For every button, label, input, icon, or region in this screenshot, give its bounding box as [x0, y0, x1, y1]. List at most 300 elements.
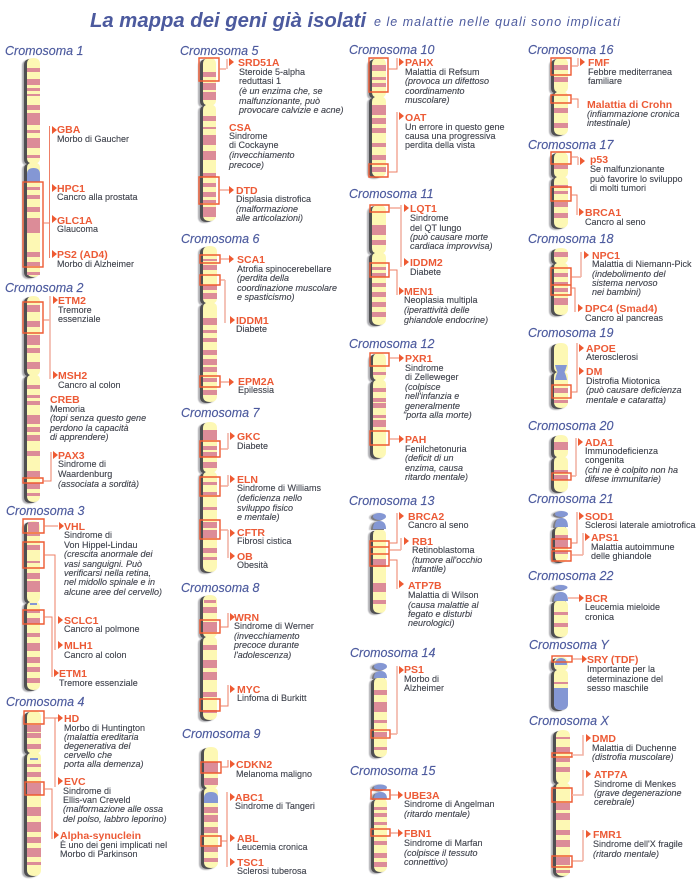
connectors — [571, 277, 581, 312]
panel: Cromosoma 8 — [181, 581, 314, 720]
connectors — [571, 66, 578, 108]
gene OB — [230, 551, 268, 570]
chromosome 5 diagram — [203, 58, 216, 221]
gene NPC1: NPC1 — [592, 250, 620, 262]
gene APOE: Aterosclerosi — [586, 352, 638, 362]
gene SCLC1: Cancro al polmone — [64, 624, 140, 634]
chromosome X diagram — [556, 730, 570, 876]
gene Alpha-synuclein: È uno dei geni implicati nel — [60, 840, 167, 850]
heading: Cromosoma 15 — [350, 764, 435, 778]
connector — [572, 658, 583, 660]
gene PS1 — [399, 664, 444, 693]
gene VHL: alcune aree del cervello) — [64, 587, 162, 597]
gene PAHX: muscolare) — [405, 95, 450, 105]
gene PXR1: Sindrome — [405, 363, 444, 373]
gene PS1: PS1 — [404, 664, 424, 676]
panel: Cromosoma 9 — [182, 727, 315, 876]
gene DMD: Malattia di Duchenne — [592, 743, 677, 753]
gene p53: p53 — [590, 154, 608, 166]
gene PAHX: (provoca un difettoso — [405, 76, 489, 86]
heading: Cromosoma 14 — [350, 646, 435, 660]
gene FMF — [580, 57, 672, 86]
connector — [568, 597, 579, 599]
connectors — [390, 795, 398, 833]
gene DM: Distrofia Miotonica — [586, 376, 660, 386]
gene SCA1: SCA1 — [237, 254, 265, 266]
gene UBE3A: Sindrome di Angelman — [404, 799, 495, 809]
gene SCA1: Atrofia spinocerebellare — [237, 264, 332, 274]
heading: Cromosoma 21 — [528, 492, 613, 506]
gene IDDM1 — [230, 315, 269, 334]
chromosome 1 diagram — [27, 58, 40, 277]
gene FBN1 — [398, 828, 483, 867]
gene HPC1: Cancro alla prostata — [57, 192, 138, 202]
gene CREB: perdono la capacità — [49, 423, 129, 433]
chromosome 4 diagram — [27, 711, 41, 876]
gene DMD: DMD — [592, 733, 616, 745]
heading: Cromosoma 6 — [181, 232, 260, 246]
highlight boxes — [369, 58, 388, 177]
gene ABL: Leucemia cronica — [237, 842, 308, 852]
heading: Cromosoma X — [529, 714, 610, 728]
bracket — [396, 666, 398, 734]
gene RB1: (tumore all'occhio — [412, 555, 482, 565]
gene DTD: (malformazione — [236, 204, 298, 214]
gene PAX3 — [53, 450, 139, 489]
gene ETM1: Tremore essenziale — [59, 678, 138, 688]
heading: Cromosoma 10 — [349, 43, 434, 57]
gene ABC1 — [230, 792, 315, 811]
gene FMR1: FMR1 — [593, 829, 622, 841]
panel: Cromosoma 4 — [6, 695, 167, 876]
gene BRCA1: BRCA1 — [585, 207, 621, 219]
gene OAT: Un errore in questo gene — [405, 122, 505, 132]
highlight box — [371, 730, 390, 738]
gene ETM2: ETM2 — [58, 295, 86, 307]
gene FMR1 — [586, 829, 683, 859]
gene TSC1 — [230, 857, 307, 876]
panel: Cromosoma 16 — [528, 43, 680, 135]
gene VHL: Sindrome di — [64, 530, 112, 540]
gene HD: HD — [64, 713, 80, 725]
gene MEN1: ghiandole endocrine) — [404, 315, 488, 325]
heading: Cromosoma 3 — [6, 504, 85, 518]
gene CREB — [49, 394, 146, 442]
gene PAH: enzima, causa — [405, 463, 463, 473]
panel: Cromosoma 20 — [528, 419, 678, 492]
chromosome 10 diagram — [372, 58, 386, 177]
chromosome 20 diagram — [554, 435, 568, 492]
gene MYC: Linfoma di Burkitt — [237, 693, 307, 703]
chromosome 21 diagram — [555, 511, 568, 562]
gene MSH2: Cancro al colon — [58, 380, 121, 390]
bracket — [577, 58, 579, 66]
highlight boxes — [201, 762, 221, 846]
gene PAH: (deficit di un — [405, 453, 454, 463]
gene LQT1: Sindrome — [410, 213, 449, 223]
highlight boxes — [552, 753, 572, 867]
gene APS1 — [585, 532, 675, 561]
brackets — [572, 735, 583, 861]
gene p53: può favorire lo sviluppo — [590, 174, 683, 184]
gene IDDM1: IDDM1 — [236, 315, 269, 327]
gene PAHX: PAHX — [405, 57, 433, 69]
gene DPC4: Cancro al pancreas — [585, 313, 664, 323]
chromosome 15 diagram — [374, 784, 387, 872]
gene ATP7B: ATP7B — [408, 580, 442, 592]
gene Malattia di Crohn: Malattia di Crohn — [587, 99, 672, 111]
gene ADA1: difese immunitarie) — [585, 474, 661, 484]
bracket — [580, 252, 582, 277]
chromosome 2 diagram — [27, 296, 40, 502]
gene ATP7A — [586, 769, 682, 807]
gene Malattia di Crohn: intestinale) — [587, 118, 631, 128]
gene GKC: GKC — [237, 431, 261, 443]
gene HD: (malattia ereditaria — [64, 732, 139, 742]
gene SRD51A: malfunzionante, può — [239, 96, 320, 106]
connectors — [389, 208, 401, 295]
gene ETM1 — [54, 668, 138, 688]
gene SCLC1 — [58, 615, 140, 634]
chromosome 22 diagram — [554, 585, 568, 637]
gene WRN: (invecchiamento — [234, 631, 300, 641]
gene PS1: Morbo di — [404, 674, 439, 684]
heading: Cromosoma 2 — [5, 281, 84, 295]
gene VHL: nel midollo spinale e in — [64, 577, 155, 587]
chromosome 7 diagram — [203, 422, 217, 572]
gene SRD51A — [229, 57, 344, 115]
gene BRCA2: Cancro al seno — [408, 520, 469, 530]
panel: Cromosoma 5 — [180, 44, 344, 223]
highlight boxes — [200, 620, 220, 711]
connectors — [388, 58, 397, 172]
gene ETM2: essenziale — [58, 314, 101, 324]
heading: Cromosoma 4 — [6, 695, 85, 709]
gene MLH1: MLH1 — [64, 640, 93, 652]
panel: Cromosoma 22 — [528, 569, 660, 637]
gene SRY — [582, 654, 663, 693]
gene HD: cervello che — [64, 750, 112, 760]
gene NPC1: nei bambini) — [592, 287, 641, 297]
gene DPC4: DPC4 (Smad4) — [585, 303, 657, 315]
gene RB1 — [404, 536, 482, 574]
gene CSA: CSA — [229, 122, 252, 134]
gene GBA: GBA — [57, 124, 81, 136]
gene ETM2: Tremore — [58, 305, 92, 315]
gene HD: Morbo di Huntington — [64, 723, 145, 733]
gene EPM2A: EPM2A — [238, 376, 275, 388]
gene FMR1: Sindrome dell'X fragile — [593, 839, 683, 849]
gene MEN1: (iperattività delle — [404, 305, 470, 315]
gene APS1: Malattia autoimmune — [591, 542, 675, 552]
gene TSC1: TSC1 — [237, 857, 264, 869]
connectors — [389, 358, 399, 439]
connectors — [572, 860, 583, 862]
gene LQT1: (può causare morte — [410, 232, 488, 242]
gene SCA1: (perdita della — [237, 273, 289, 283]
gene MSH2: MSH2 — [58, 370, 87, 382]
gene PAX3: Waardenburg — [58, 469, 112, 479]
subtitle: e le malattie nelle quali sono implicati — [374, 15, 621, 29]
chromosome 16 diagram — [554, 58, 568, 135]
gene PAHX: coordinamento — [405, 86, 465, 96]
connectors — [219, 69, 229, 190]
gene CREB: (topi senza questo gene — [50, 413, 146, 423]
gene ATP7A: cerebrale) — [594, 797, 635, 807]
panel: Cromosoma 10 — [349, 43, 505, 177]
gene PS2 — [52, 249, 134, 269]
gene HD: porta alla demenza) — [63, 759, 144, 769]
heading: Cromosoma 7 — [181, 406, 261, 420]
connectors — [220, 613, 228, 706]
gene PXR1: generalmente — [405, 401, 460, 411]
gene CSA: di Cockayne — [229, 140, 279, 150]
heading: Cromosoma 16 — [528, 43, 613, 57]
gene UBE3A: (ritardo mentale) — [404, 809, 470, 819]
gene DM: mentale e cataratta) — [586, 395, 666, 405]
gene GLC1A — [52, 215, 98, 234]
highlight box — [552, 473, 571, 480]
gene FBN1: Sindrome di Marfan — [404, 838, 483, 848]
gene MYC: MYC — [237, 684, 261, 696]
heading: Cromosoma 1 — [5, 44, 84, 58]
chromosome 13 diagram — [373, 513, 386, 613]
gene EPM2A: Epilessia — [238, 385, 274, 395]
gene Malattia di Crohn: (infiammazione cronica — [587, 109, 680, 119]
gene GBA: Morbo di Gaucher — [57, 134, 129, 144]
bracket — [400, 538, 402, 550]
gene OB: Obesità — [237, 560, 268, 570]
highlight boxes — [23, 302, 43, 483]
gene NPC1 — [584, 250, 692, 297]
highlight boxes — [370, 353, 389, 445]
gene ELN: (deficienza nello — [237, 493, 302, 503]
panel: Cromosoma 11 — [349, 187, 493, 325]
gene MEN1 — [399, 286, 488, 325]
gene LQT1: cardiaca improvvisa) — [410, 241, 493, 251]
heading: Cromosoma 17 — [528, 138, 614, 152]
gene DMD — [586, 733, 677, 762]
gene GKC: Diabete — [237, 441, 268, 451]
gene DM: (può causare deficienza — [586, 385, 682, 395]
connector — [571, 343, 577, 392]
connectors — [220, 449, 228, 530]
gene ABC1: ABC1 — [235, 792, 264, 804]
heading: Cromosoma 13 — [349, 494, 434, 508]
gene p53: di molti tumori — [590, 183, 646, 193]
gene SRY: determinazione del — [587, 674, 663, 684]
gene LQT1: del QT lungo — [410, 223, 461, 233]
gene NPC1: (indebolimento del — [592, 269, 667, 279]
gene ADA1 — [578, 437, 678, 484]
heading: Cromosoma 22 — [528, 569, 613, 583]
gene MYC — [230, 684, 307, 703]
gene FMF: familiare — [588, 76, 622, 86]
gene GKC — [230, 431, 268, 451]
gene VHL: vasi sanguigni. Può — [64, 559, 142, 569]
gene BRCA2: BRCA2 — [408, 511, 444, 523]
gene ADA1: (chi ne è colpito non ha — [585, 465, 678, 475]
gene PAH — [399, 434, 468, 482]
gene SRD51A: Steroide 5-alpha — [239, 67, 305, 77]
gene BCR: Leucemia mieloide — [585, 602, 660, 612]
panel: Cromosoma 15 — [350, 764, 495, 872]
highlight boxes — [551, 58, 571, 103]
gene ETM2 — [53, 295, 101, 324]
heading: Cromosoma 12 — [349, 337, 434, 351]
panel: Cromosoma 13 — [349, 494, 482, 628]
gene ABC1: Sindrome di Tangeri — [235, 801, 315, 811]
gene VHL — [59, 521, 162, 597]
connectors — [44, 526, 58, 677]
gene UBE3A — [398, 790, 495, 819]
connectors — [571, 512, 583, 555]
gene PXR1: "porta alla morte) — [403, 410, 472, 420]
gene Malattia di Crohn — [587, 99, 680, 128]
gene ELN — [230, 474, 322, 522]
chromosome 9 diagram — [204, 747, 218, 868]
panel: Cromosoma 21 — [528, 492, 696, 562]
gene EVC: Sindrome di — [63, 786, 111, 796]
chromosome 3 diagram — [27, 521, 40, 690]
gene PS2: Morbo di Alzheimer — [57, 259, 134, 269]
gene HD: degenerativa del — [64, 741, 132, 751]
gene ATP7A: Sindrome di Menkes — [594, 779, 677, 789]
gene SOD1: Sclerosi laterale amiotrofica — [585, 520, 696, 530]
heading: Cromosoma 9 — [182, 727, 261, 741]
gene DTD: DTD — [236, 185, 258, 197]
gene Alpha-synuclein: Morbo di Parkinson — [60, 849, 138, 859]
gene ATP7A: (grave degenerazione — [594, 788, 682, 798]
gene PXR1: nell'infanzia e — [405, 391, 459, 401]
highlight boxes — [370, 205, 389, 277]
heading: Cromosoma 11 — [349, 187, 434, 201]
chromosome 17 diagram — [554, 152, 568, 228]
gene IDDM2: IDDM2 — [410, 257, 443, 269]
gene WRN: precoce durante — [233, 640, 299, 650]
gene PS1: Alzheimer — [404, 683, 444, 693]
gene SCLC1: SCLC1 — [64, 615, 99, 627]
chromosome 14 diagram — [374, 663, 387, 757]
gene DMD: (distrofia muscolare) — [592, 752, 674, 762]
connectors — [220, 259, 229, 382]
gene CREB: di apprendere) — [50, 432, 109, 442]
gene EPM2A — [229, 376, 275, 395]
panel: Cromosoma 14 — [350, 646, 444, 757]
connectors — [44, 718, 58, 839]
gene ELN: e mentale) — [237, 512, 280, 522]
gene CFTR: Fibrosi cistica — [237, 536, 292, 546]
gene PXR1 — [399, 353, 472, 420]
panel: Cromosoma 7 — [181, 406, 322, 572]
gene SRY: SRY (TDF) — [587, 654, 638, 666]
gene WRN: WRN — [234, 612, 259, 624]
gene LQT1: LQT1 — [410, 203, 437, 215]
gene RB1: Retinoblastoma — [412, 545, 475, 555]
gene NPC1: sistema nervoso — [592, 278, 658, 288]
gene FBN1: connettivo) — [404, 857, 448, 867]
heading: Cromosoma 19 — [528, 326, 613, 340]
highlight boxes — [199, 58, 219, 204]
gene FMF: FMF — [588, 57, 610, 69]
chromosome 6 diagram — [203, 246, 217, 402]
gene CREB: Memoria — [50, 404, 85, 414]
gene BRCA1: Cancro al seno — [585, 217, 646, 227]
panel: Cromosoma 3 — [6, 504, 162, 690]
gene MLH1: Cancro al colon — [64, 650, 127, 660]
gene IDDM2 — [404, 257, 443, 277]
gene UBE3A: UBE3A — [404, 790, 440, 802]
gene CSA: Sindrome — [229, 131, 268, 141]
gene TSC1: Sclerosi tuberosa — [237, 866, 307, 876]
gene PAHX — [399, 57, 489, 105]
chromosome 19 diagram — [554, 343, 568, 408]
gene GLC1A: GLC1A — [57, 215, 93, 227]
gene APS1: APS1 — [591, 532, 619, 544]
heading: Cromosoma 18 — [528, 232, 613, 246]
gene MEN1: MEN1 — [404, 286, 433, 298]
highlight box — [552, 656, 572, 662]
gene MLH1 — [58, 640, 127, 660]
gene SCA1: e spasticismo) — [237, 292, 295, 302]
gene IDDM1: Diabete — [236, 324, 267, 334]
gene EVC — [58, 776, 167, 824]
chromosome 12 diagram — [373, 353, 386, 458]
connectors — [43, 320, 51, 481]
gene EVC: del polso, labbro leporino) — [63, 814, 167, 824]
heading: Cromosoma 20 — [528, 419, 613, 433]
gene PXR1: (colpisce — [405, 382, 441, 392]
highlight box — [552, 385, 571, 398]
gene ATP7B — [399, 580, 480, 628]
gene CDKN2: CDKN2 — [236, 759, 272, 771]
gene EVC: (malformazione alle ossa — [63, 804, 163, 814]
gene ATP7A: ATP7A — [594, 769, 628, 781]
chromosome 8 diagram — [203, 595, 217, 720]
gene DM — [579, 366, 682, 405]
gene RB1: infantile) — [412, 564, 446, 574]
gene CSA: (invecchiamento — [229, 150, 295, 160]
gene DTD: alle articolazioni) — [236, 213, 303, 223]
gene SRD51A: SRD51A — [238, 57, 280, 69]
gene ETM1: ETM1 — [59, 668, 87, 680]
gene ATP7B: (causa malattie al — [408, 600, 480, 610]
gene FMR1: (ritardo mentale) — [593, 849, 659, 859]
gene APOE — [579, 343, 638, 362]
gene WRN — [230, 612, 314, 660]
gene ABL — [230, 833, 308, 852]
heading: Cromosoma Y — [529, 638, 610, 652]
gene CDKN2 — [230, 759, 312, 779]
heading: Cromosoma 5 — [180, 44, 259, 58]
connector — [43, 126, 50, 258]
gene IDDM2: Diabete — [410, 267, 441, 277]
gene BRCA1 — [579, 207, 646, 227]
bracket — [582, 533, 584, 555]
gene SOD1: SOD1 — [585, 511, 614, 523]
gene OAT: OAT — [405, 112, 427, 124]
gene SRY: sesso maschile — [587, 683, 649, 693]
gene RB1: RB1 — [412, 536, 433, 548]
gene FMF: Febbre mediterranea — [588, 67, 672, 77]
gene OAT — [399, 112, 505, 150]
gene VHL: Von Hippel-Lindau — [64, 540, 138, 550]
gene ATP7B: Malattia di Wilson — [408, 590, 479, 600]
gene SOD1 — [579, 511, 696, 530]
panel: Cromosoma 19 — [528, 326, 682, 408]
gene PS2: PS2 (AD4) — [57, 249, 108, 261]
gene APOE: APOE — [586, 343, 616, 355]
